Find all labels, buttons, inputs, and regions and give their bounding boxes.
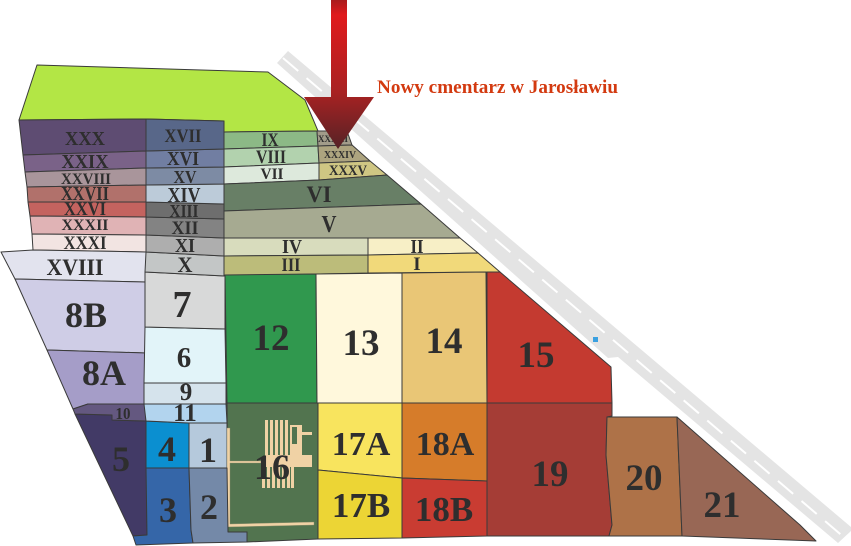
plot XXX: XXX [65,128,106,150]
plot 20: 20 [626,458,662,499]
plot 21: 21 [704,485,740,526]
plot XXVII [27,183,146,205]
plot 13 [316,273,402,403]
building complex [227,420,314,527]
plot XXXIII [317,131,352,146]
plot 8B: 8B [65,295,107,335]
plot 16: 16 [254,447,290,487]
plot XXXV: XXXV [329,163,367,179]
plot I [368,253,500,275]
plot XXVI [28,199,146,220]
plot 12: 12 [252,318,290,359]
plot 15 [487,272,612,403]
plot 1 [189,423,227,470]
plot III [224,255,368,276]
plot 18A [402,403,487,481]
plot 18A: 18A [416,426,475,463]
plot 8A [47,350,146,409]
plot VIII: VIII [256,147,286,168]
plot I: I [413,254,421,275]
plot 13: 13 [342,323,380,364]
plot XXVIII: XXVIII [61,171,111,188]
plot 17B: 17B [332,486,390,525]
plot 19: 19 [532,454,568,495]
label: new cemetery in Jarosław: Nowy cmentarz w Jarosławiu [377,77,618,98]
plot 11: 11 [173,400,197,427]
plot IV [224,236,368,258]
plot 21 [677,417,816,541]
plot IV: IV [282,236,302,258]
plot 14: 14 [426,321,462,362]
plot XV [146,167,224,187]
plot 2 [189,468,247,543]
plot XV: XV [174,167,196,187]
plot 18B [402,478,487,538]
plot XI: XI [175,235,195,257]
plot VII: VII [260,166,284,183]
plot XII: XII [172,218,198,239]
plot II: II [410,236,424,258]
plot X [145,252,225,277]
plot VIII [224,146,319,168]
plot XVII: XVII [164,126,202,147]
plot 6 [144,327,226,383]
plot 15: 15 [518,335,554,376]
plot 20 [606,417,682,536]
plot 2: 2 [200,487,218,527]
plot XXXI: XXXI [64,233,106,254]
plot II [368,236,478,258]
plot XXXIV: XXXIV [324,149,356,161]
plot IX [224,130,318,151]
plot 3 [133,468,193,545]
plot XXIX: XXIX [62,151,109,173]
plot XXVII: XXVII [61,183,109,205]
plot XVII [146,119,224,151]
plot XI [146,235,224,257]
plot 9: 9 [180,379,192,406]
plot 6: 6 [177,342,191,374]
plot 8A: 8A [82,353,126,393]
plot XVI [146,148,224,170]
plot V [224,204,460,238]
plot XXVI: XXVI [64,199,106,220]
plot XXXIII: XXXIII [318,134,348,144]
plot XVIII [1,250,146,282]
plot 10 [73,404,146,423]
plot 5: 5 [112,439,130,479]
plot XXIX [23,151,146,173]
plot 4: 4 [158,429,176,469]
plot XII [146,217,224,239]
plot 17A [318,403,402,478]
plot XXXV [319,161,387,180]
plot 14 [402,272,487,403]
plot XIV: XIV [168,183,200,207]
plot 7: 7 [172,284,192,326]
plot 10: 10 [116,404,130,423]
plot 17A: 17A [332,426,391,463]
plot 9 [144,379,226,406]
plot XXXII [30,216,146,235]
plot X: X [178,252,193,277]
plot 8B [15,279,146,353]
plot 11 [144,400,227,427]
plot 16 [227,403,318,542]
plot XXVIII [25,168,146,188]
plot VI: VI [306,182,332,207]
icon: small blue marker [593,337,598,342]
plot XXX [19,119,146,155]
plot XVI: XVI [167,148,199,170]
plot XIV [146,183,224,207]
plot 17B [318,470,402,539]
plot 7 [145,272,225,329]
plot: new cemetery area [19,65,318,132]
plot VII [224,163,319,184]
plot XXXII: XXXII [62,217,108,234]
plot IX: IX [262,130,279,151]
plot VI [224,175,421,211]
arrow: pointing to new cemetery [304,0,374,149]
plot 1: 1 [199,430,217,470]
plot XXXIV [318,145,370,163]
plot 18B: 18B [415,490,473,529]
plot 19 [487,403,612,536]
plot 5 [75,414,147,536]
plot XVIII: XVIII [46,255,104,280]
plot V: V [322,212,337,238]
plot III: III [282,255,300,276]
road [277,51,851,543]
plot XIII [146,201,224,221]
plot 4 [146,421,189,469]
plot 3: 3 [159,490,177,530]
plot XXXI [32,233,146,254]
plot 12 [225,274,317,403]
plot XIII: XIII [170,201,198,221]
